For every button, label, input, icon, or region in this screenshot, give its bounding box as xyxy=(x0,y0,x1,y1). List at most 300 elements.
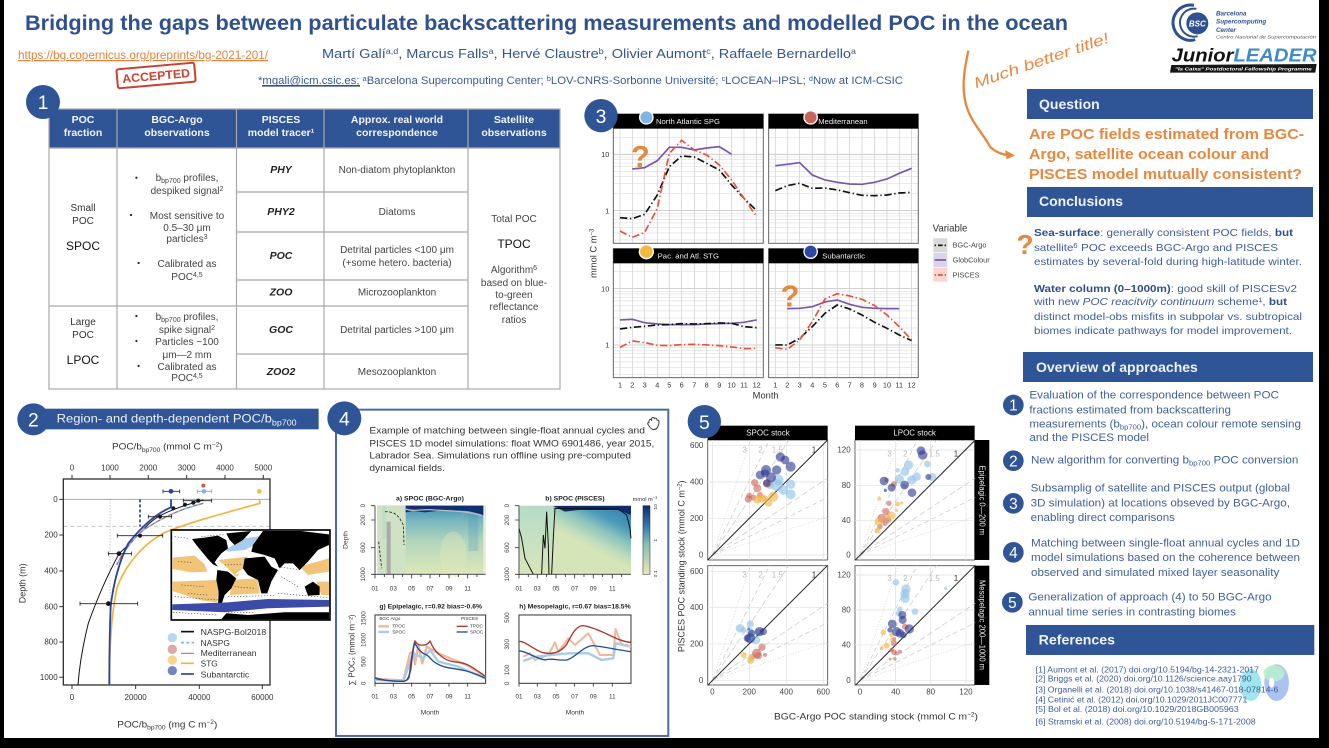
facet titles: Mediterranean xyxy=(818,117,868,126)
axis titles: POC/b xyxy=(117,719,144,729)
axis titles: (mg C m xyxy=(166,719,206,729)
approach 1: and the PISCES model xyxy=(1029,432,1149,444)
tick labels xyxy=(690,441,973,696)
approach 2 xyxy=(1003,450,1298,471)
column: real world correspondence xyxy=(339,165,455,378)
upper axes: 07 xyxy=(571,585,579,592)
tick labels: 0 xyxy=(699,676,704,685)
plot frame and ticks: 5000 xyxy=(254,464,273,473)
lower axes: 300 xyxy=(504,639,511,650)
affiliations: Now at ICM-CSIC xyxy=(813,75,903,87)
approach 5: annual time series in contrasting biomes xyxy=(1028,607,1236,619)
tick labels: 120 xyxy=(837,571,851,580)
axis titles: ) xyxy=(219,442,223,452)
axis titles: Depth (m) xyxy=(18,563,28,603)
tick labels: 400 xyxy=(690,478,704,487)
line chart g: TPOC xyxy=(392,624,406,629)
legend: BGC-Argo xyxy=(953,241,986,250)
column: real world correspondence: Non-diatom phytoplankton xyxy=(339,165,455,176)
affiliations: LOV-CNRS-Sorbonne Université; xyxy=(551,75,722,87)
authors: , Marcus Falls xyxy=(398,46,489,61)
heading bar: bp700 xyxy=(272,418,297,427)
plot frame and ticks xyxy=(40,464,274,702)
logo: BSC: Barcelona xyxy=(1216,10,1247,17)
column: PISCES tracers: PHY xyxy=(270,164,293,176)
facet titles: Pac. and Atl. STG xyxy=(658,251,719,260)
badge 5 xyxy=(688,405,721,438)
column: real world correspondence: Detrital particles <100 μm xyxy=(340,245,454,256)
description: dynamical fields. xyxy=(369,463,445,473)
axis labels: mmol C m xyxy=(588,235,598,278)
references list: [6] Stramski et al. (2008) doi.org/10.5194/bg-5-171-2008 xyxy=(1036,717,1256,727)
axis titles: ) xyxy=(214,719,217,729)
lower axes: 09 xyxy=(590,694,597,701)
affiliations: d xyxy=(809,76,813,83)
axis labels: 5 xyxy=(823,380,827,389)
tick labels: 400 xyxy=(780,687,794,696)
upper axes: 03 xyxy=(534,585,541,592)
badge 4: 4 xyxy=(339,410,350,431)
references list: [1] Aumont et al. (2017) doi.org/10.5194/bg-14-2321-2017 xyxy=(1036,665,1259,675)
conclusions heading xyxy=(1027,187,1313,217)
axis labels: 10 xyxy=(601,284,609,293)
column: BGC-Argo observations: μm—2 mm xyxy=(162,350,212,361)
references heading xyxy=(1026,625,1314,655)
question text xyxy=(1029,126,1304,183)
column: BGC-Argo observations: Particles ~100 xyxy=(155,337,219,348)
legend: Mediterranean xyxy=(201,648,257,658)
plot frame and ticks: 20000 xyxy=(125,693,147,702)
surface points xyxy=(163,484,262,494)
affiliations: Barcelona Supercomputing Center; xyxy=(367,75,547,87)
approach 4: Matching between single-float annual cycles and 1D xyxy=(1031,538,1300,550)
column: PISCES tracers: GOC xyxy=(269,324,293,336)
affiliations xyxy=(258,75,903,87)
column: POC fraction xyxy=(66,203,100,367)
reference rays: 1.5 xyxy=(772,445,783,454)
line chart g: TPOC xyxy=(470,624,484,629)
accepted stamp xyxy=(116,63,196,88)
column: BGC-Argo observations: 3 xyxy=(204,234,208,241)
upper axes: 01 xyxy=(515,585,523,592)
question heading: Question xyxy=(1039,96,1100,112)
question marks xyxy=(631,140,799,314)
axis labels: 8 xyxy=(860,380,864,389)
authors: a xyxy=(489,47,494,56)
facet headers: Epipelagic 0—200 m xyxy=(978,466,987,535)
reference rays: 1 xyxy=(812,445,817,454)
column: PISCES tracers: POC xyxy=(270,250,293,262)
column: BGC-Argo observations: POC xyxy=(171,373,193,384)
column: POC fraction: LPOC xyxy=(67,353,100,367)
column: satellite: reflectance xyxy=(490,302,539,313)
plot frame and ticks: 2000 xyxy=(139,464,158,473)
badge 1: 1 xyxy=(38,93,48,114)
tick labels: 40 xyxy=(891,687,901,696)
plot frame and ticks: 4000 xyxy=(216,464,234,473)
reference rays: 1.5 xyxy=(929,574,940,583)
column: BGC-Argo observations: b xyxy=(156,312,161,323)
affiliations: LOCEAN–IPSL; xyxy=(725,75,809,87)
authors: c xyxy=(706,47,711,56)
lower axes: Month xyxy=(566,709,585,716)
lower axes: 100 xyxy=(504,664,511,675)
plot frame and ticks: 0 xyxy=(70,464,75,473)
affiliations: b xyxy=(547,76,551,83)
upper axes: 200 xyxy=(360,514,367,525)
column: BGC-Argo observations: Most sensitive to xyxy=(150,211,225,222)
authors: b xyxy=(599,47,604,56)
conclusions text: satellite xyxy=(1034,242,1070,254)
approach 3: enabling direct comparisons xyxy=(1031,512,1175,524)
legend xyxy=(933,224,990,282)
facet headers: SPOC stock xyxy=(746,429,790,438)
reference rays xyxy=(708,440,975,685)
axis labels: 2 xyxy=(785,380,789,389)
region dots xyxy=(639,111,817,259)
axis titles: ) xyxy=(975,711,978,721)
axis labels: 9 xyxy=(873,380,877,389)
approach 1: 1 xyxy=(1009,398,1018,415)
reference rays: 1 xyxy=(954,574,959,583)
column: BGC-Argo observations: POC xyxy=(171,272,193,283)
lower axes: 1500 xyxy=(361,611,368,625)
column: POC fraction: SPOC xyxy=(66,239,100,253)
heading bar xyxy=(17,403,319,435)
question heading xyxy=(1027,89,1313,119)
tick labels: 200 xyxy=(690,640,704,649)
legend xyxy=(168,627,267,679)
table header: Satellite xyxy=(494,114,534,126)
tick labels: 120 xyxy=(837,446,851,455)
panel 1: table xyxy=(26,85,560,389)
column: PISCES tracers: PHY2 xyxy=(267,206,295,218)
overview heading: Overview of approaches xyxy=(1036,359,1198,375)
affiliations: c xyxy=(722,76,726,83)
approach 5: 5 xyxy=(1008,595,1017,612)
authors: , Raffaele Bernardello xyxy=(711,46,851,61)
panel 2: depth profile xyxy=(17,403,330,732)
lower axes: 03 xyxy=(390,694,397,701)
plot frame and ticks: 0 xyxy=(70,693,75,702)
approach 5: Generalization of approach (4) to 50 BGC-Argo xyxy=(1028,592,1272,604)
references list: [2] Briggs et al. (2020) doi.org/10.1126/science.aay1790 xyxy=(1036,674,1252,684)
lower axes: 11 xyxy=(609,694,616,701)
tick labels: 0 xyxy=(699,551,704,560)
overview heading xyxy=(1023,352,1313,382)
series: GlobColour xyxy=(620,147,912,325)
column: real world correspondence: Mesozooplankton xyxy=(358,367,436,378)
column: real world correspondence: Detrital particles >100 μm xyxy=(340,325,454,336)
table header xyxy=(49,109,560,148)
heatmap b: b) SPOC (PISCES) xyxy=(545,496,605,502)
column: BGC-Argo observations: despiked signal xyxy=(151,186,220,197)
description: Labrador Sea. Simulations run offline using pre-computed xyxy=(369,450,631,460)
legend: STG xyxy=(201,659,218,669)
logo: Junior Leader: JuniorLEADER xyxy=(1172,44,1317,65)
upper axes xyxy=(343,503,631,592)
lower axes: 01 xyxy=(515,694,523,701)
question text: Are POC fields estimated from BGC- xyxy=(1029,126,1304,143)
reference rays: 1 xyxy=(812,570,817,579)
upper axes: 01 xyxy=(371,585,379,592)
heatmap a: a) SPOC (BGC-Argo) xyxy=(396,496,464,502)
axis titles: −2 xyxy=(678,483,684,490)
upper axes: 09 xyxy=(590,585,597,592)
tick labels: 600 xyxy=(817,687,831,696)
logo: Junior Leader xyxy=(1170,44,1317,73)
axis titles xyxy=(18,442,223,732)
panel 3: seasonal cycles xyxy=(584,99,990,401)
axis labels: 10 xyxy=(883,380,891,389)
axis titles: BGC-Argo POC standing stock (mmol C m xyxy=(774,711,950,721)
axis labels: 11 xyxy=(740,380,748,389)
colour bar: 0.1 xyxy=(653,570,659,577)
plot frame and ticks: 0 xyxy=(53,495,58,504)
column: PISCES tracers xyxy=(266,164,295,378)
lower axes: 500 xyxy=(504,612,511,623)
upper axes: 0 xyxy=(504,503,511,507)
conclusions text: distinct model-obs misfits in subpolar vs. subtropical xyxy=(1034,311,1302,323)
upper axes: 11 xyxy=(609,585,616,592)
axis labels: 5 xyxy=(667,380,671,389)
scatter: LPOC epipelagic xyxy=(875,446,936,534)
plot frames and grids xyxy=(708,440,975,685)
reference rays: 3 xyxy=(887,449,892,458)
axis labels: 10 xyxy=(728,380,736,389)
axis labels: 3 xyxy=(798,380,802,389)
curves xyxy=(78,499,260,685)
axis labels: 3 xyxy=(643,380,647,389)
axis titles: −2 xyxy=(967,712,975,718)
legend: PISCES xyxy=(953,270,980,279)
plot frame and ticks: 40000 xyxy=(188,693,211,702)
tick labels: 80 xyxy=(842,481,851,490)
legend: Subantarctic xyxy=(201,669,249,679)
reference rays: 3 xyxy=(742,570,747,579)
plot frame and ticks: 3000 xyxy=(178,464,196,473)
table grid xyxy=(49,109,560,389)
description: PISCES 1D model simulations: float WMO 6901486, year 2015, xyxy=(369,438,654,448)
reference rays: 1.5 xyxy=(772,570,783,579)
column: BGC-Argo observations: Calibrated as xyxy=(158,362,216,373)
lower axes: ∑ POC₂ (mmol m⁻²) xyxy=(347,614,356,686)
column: satellite: to-green xyxy=(495,290,533,301)
references blob logo xyxy=(1240,664,1289,701)
references list: [4] Cetinić et al. (2012) doi.org/10.1029/2011JC007771 xyxy=(1036,694,1248,704)
legend: Variable xyxy=(933,224,967,235)
reference rays: 2 xyxy=(903,449,908,458)
question text: Argo, satellite ocean colour and xyxy=(1029,146,1269,163)
column: satellite: 6 xyxy=(533,265,537,272)
column: BGC-Argo observations: 4,5 xyxy=(193,373,203,380)
tick labels: 40 xyxy=(842,516,851,525)
references list: [3] Organelli et al. (2018) doi.org/10.1038/s41467-018-07814-6 xyxy=(1036,684,1279,694)
axis labels: 4 xyxy=(655,380,659,389)
lower axes: 0 xyxy=(361,681,368,685)
column: POC fraction: POC xyxy=(72,216,94,227)
axis labels: 12 xyxy=(753,380,761,389)
tick labels: 600 xyxy=(690,567,704,576)
column: satellite xyxy=(481,214,547,326)
conclusions text: Sea-surface : generally consistent POC fields, but xyxy=(1034,227,1294,239)
line chart g xyxy=(375,605,486,683)
axis labels: 7 xyxy=(692,380,696,389)
column: BGC-Argo observations: b xyxy=(156,173,161,184)
facet titles: North Atlantic SPG xyxy=(656,117,720,126)
facet headers: LPOC stock xyxy=(893,429,936,438)
accepted stamp: ACCEPTED xyxy=(122,66,191,86)
colour bar: mmol m xyxy=(633,497,653,503)
axis labels: 1 xyxy=(605,206,609,215)
question marks: ? xyxy=(631,140,650,174)
axis labels: −3 xyxy=(589,228,595,235)
axis titles: bp700 xyxy=(142,448,161,454)
axis titles: bp700 xyxy=(147,726,166,732)
axis labels: 1 xyxy=(605,341,609,350)
scatter: SPOC mesopelagic xyxy=(736,620,767,664)
axis labels: 1 xyxy=(618,380,622,389)
lower axes: 05 xyxy=(552,694,560,701)
axis labels: 8 xyxy=(705,380,709,389)
lower axes: 500 xyxy=(361,656,368,667)
axis labels: 6 xyxy=(680,380,684,389)
inset map xyxy=(171,530,330,620)
column: POC fraction: Small xyxy=(70,203,96,214)
upper axes: 05 xyxy=(552,585,560,592)
table header: PISCES xyxy=(262,114,300,126)
badge 3 xyxy=(584,99,618,132)
tick labels: 80 xyxy=(926,687,936,696)
conclusions heading: Conclusions xyxy=(1039,193,1123,209)
tick labels: 0 xyxy=(858,687,863,696)
table header: observations xyxy=(144,127,210,139)
colour bar xyxy=(633,495,659,577)
right column xyxy=(1002,89,1314,727)
tick labels: 600 xyxy=(690,441,704,450)
approach 1: bp700 xyxy=(1120,425,1141,432)
plot frame and ticks: 800 xyxy=(44,638,58,647)
heatmap b xyxy=(519,496,631,574)
logo: Junior Leader: "la Caixa" Postdoctoral Fellowship Programme xyxy=(1175,66,1312,71)
lower axes: 09 xyxy=(445,694,453,701)
line chart g: PISCES xyxy=(461,616,478,621)
approach 1: Evaluation of the correspondence between POC xyxy=(1029,390,1279,402)
line chart g: SPOC xyxy=(470,629,484,634)
column: BGC-Argo observations: 0.5–30 μm xyxy=(163,223,211,234)
column: BGC-Argo observations: 2 xyxy=(220,186,224,193)
axis titles: (mmol C m xyxy=(160,442,212,452)
colour bar: −3 xyxy=(653,495,658,500)
lower axes: 07 xyxy=(426,694,434,701)
approach 3 xyxy=(1003,483,1290,524)
conclusions text: POC exceeds BGC-Argo and PISCES xyxy=(1078,242,1278,254)
question text: PISCES model mutually consistent? xyxy=(1029,166,1302,183)
heading bar: 2 xyxy=(28,411,39,432)
axis titles: −2 xyxy=(206,720,215,726)
plot frame and ticks: 400 xyxy=(44,567,58,576)
axis labels: 1 xyxy=(773,380,777,389)
approach 2: bp700 xyxy=(1189,460,1210,467)
reference rays: 2 xyxy=(903,574,908,583)
reference rays: 3 xyxy=(887,574,892,583)
conclusions text xyxy=(1033,227,1302,337)
axis labels: 4 xyxy=(810,380,814,389)
table header: Approx. real world xyxy=(351,114,443,126)
upper axes: 1000 xyxy=(504,567,511,581)
table header: fraction xyxy=(64,127,102,139)
column: BGC-Argo observations: 4,5 xyxy=(193,272,203,279)
approach 4: observed and simulated mixed layer seasonality xyxy=(1031,567,1280,579)
tick labels: 80 xyxy=(842,606,851,615)
heading bar: Region- and depth-dependent POC/b xyxy=(57,413,250,426)
axis labels: 2 xyxy=(630,380,634,389)
badge 5: 5 xyxy=(699,413,710,434)
approach 4: 4 xyxy=(1009,545,1018,562)
authors: , Hervé Claustre xyxy=(494,46,599,61)
scatter: SPOC epipelagic xyxy=(745,452,796,507)
upper axes: 03 xyxy=(390,585,397,592)
approaches list xyxy=(1002,390,1314,727)
colour bar: 1 xyxy=(653,539,659,542)
axis labels: 7 xyxy=(848,380,852,389)
references list xyxy=(1036,665,1279,727)
legend: NASPG xyxy=(201,638,230,648)
reference rays: 3 xyxy=(742,445,747,454)
question marks: ? xyxy=(781,280,799,314)
approach 3: Subsamplig of satellite and PISCES output (global xyxy=(1031,483,1290,495)
logo: BSC: BSC xyxy=(1189,19,1206,28)
scatter: LPOC mesopelagic xyxy=(880,579,947,661)
approach 2: POC conversion xyxy=(1210,454,1298,466)
axis labels: 9 xyxy=(717,380,721,389)
line chart h xyxy=(519,605,631,683)
question mark: ? xyxy=(1016,229,1034,260)
approach 3: 3 xyxy=(1009,496,1018,513)
line chart g: BGC Argo xyxy=(379,616,401,621)
reference rays: 1 xyxy=(954,449,959,458)
reference rays: 2 xyxy=(758,570,763,579)
reference rays: 2 xyxy=(758,445,763,454)
small multiples frames and grids xyxy=(613,114,919,378)
column: BGC-Argo observations: spike signal xyxy=(159,325,211,336)
legend: NASPG-Bol2018 xyxy=(201,627,267,637)
references heading: References xyxy=(1039,631,1115,647)
tick labels: 0 xyxy=(710,687,715,696)
authors: , Olivier Aumont xyxy=(604,46,707,61)
icon: hand cursor xyxy=(648,417,659,430)
conclusions text: 6 xyxy=(1073,243,1078,250)
axis titles: ) xyxy=(677,480,687,484)
table header: BGC-Argo xyxy=(151,114,203,126)
lower axes: 11 xyxy=(464,694,471,701)
logo: BSC: Supercomputing xyxy=(1216,19,1266,26)
badge 3: 3 xyxy=(596,107,606,128)
panel 4: single float example xyxy=(327,401,668,736)
axis titles: PISCES POC standing stock (mmol C m xyxy=(677,485,687,652)
axis labels xyxy=(588,150,916,401)
column: POC fraction: Large xyxy=(70,317,96,328)
authors: a xyxy=(851,47,857,56)
column: BGC-Argo observations: bp700 xyxy=(161,178,181,185)
column: satellite: Total POC xyxy=(491,214,537,225)
conclusions text: biomes indicate pathways for model improvement. xyxy=(1034,325,1292,337)
tick labels: 200 xyxy=(690,514,704,523)
conclusions text: estimates by several-fold during high-latitude winter. xyxy=(1034,256,1302,268)
plot frame and ticks: 1000 xyxy=(101,464,119,473)
authors: Martí Galí xyxy=(322,46,379,61)
approach 4: model simulations based on the coherence between xyxy=(1031,552,1300,564)
